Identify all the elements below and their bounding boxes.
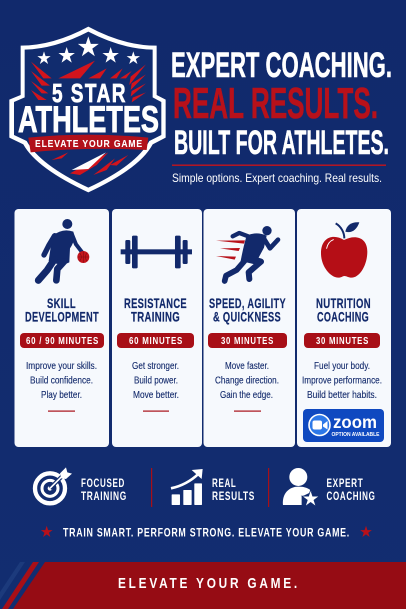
feature: focused training: TRAINING bbox=[81, 489, 127, 503]
card text: Move faster. bbox=[225, 360, 269, 372]
card title bbox=[124, 296, 187, 324]
card text bbox=[132, 360, 179, 401]
card text: Build better habits. bbox=[307, 389, 377, 401]
feature: expert coaching: EXPERT bbox=[326, 476, 364, 490]
card text: Build power. bbox=[134, 374, 178, 386]
icon: basketball player bbox=[38, 219, 89, 280]
duration pill: 60 MINUTES bbox=[129, 335, 183, 347]
duration pill bbox=[304, 333, 380, 348]
card title: COACHING bbox=[317, 310, 369, 324]
card text: Improve your skills. bbox=[26, 360, 97, 372]
heading bbox=[171, 45, 392, 162]
logo: 5 Star Athletes shield: ATHLETES bbox=[18, 99, 159, 140]
icon: sprinter bbox=[216, 226, 278, 281]
icon: target bbox=[35, 467, 72, 503]
panel: nutrition coaching bbox=[297, 209, 391, 447]
duration pill: 60 / 90 MINUTES bbox=[26, 335, 99, 347]
card text: Move better. bbox=[133, 389, 179, 401]
icon: apple bbox=[321, 222, 367, 278]
card title: SPEED, AGILITY bbox=[209, 296, 286, 311]
feature: focused training bbox=[35, 467, 127, 503]
feature: expert coaching bbox=[283, 468, 376, 507]
footer band: ELEVATE YOUR GAME. bbox=[118, 575, 300, 592]
zoom badge bbox=[303, 409, 384, 442]
feature: real results: REAL bbox=[212, 476, 236, 490]
zoom badge: zoom bbox=[333, 412, 377, 432]
footer band bbox=[0, 562, 406, 609]
card title: NUTRITION bbox=[316, 296, 371, 311]
card text: Gain the edge. bbox=[220, 389, 273, 401]
duration pill bbox=[117, 333, 194, 348]
card title: & QUICKNESS bbox=[213, 310, 281, 324]
card title bbox=[25, 296, 99, 324]
card title: DEVELOPMENT bbox=[25, 310, 99, 324]
duration pill: 30 MINUTES bbox=[316, 335, 369, 347]
card title: TRAINING bbox=[131, 310, 180, 324]
feature: real results: RESULTS bbox=[212, 489, 255, 503]
card text bbox=[26, 360, 97, 401]
feature: expert coaching: COACHING bbox=[326, 489, 376, 503]
card text: Play better. bbox=[41, 389, 82, 401]
feature: real results bbox=[171, 469, 255, 505]
duration pill: 30 MINUTES bbox=[221, 335, 274, 347]
card text: Build confidence. bbox=[30, 374, 93, 386]
panel: resistance training bbox=[112, 209, 202, 447]
card text bbox=[215, 360, 279, 401]
card text: Change direction. bbox=[215, 374, 279, 386]
logo: 5 Star Athletes shield: ELEVATE YOUR GAME bbox=[35, 139, 143, 150]
icon: rising bar chart bbox=[171, 469, 203, 505]
card title: RESISTANCE bbox=[124, 296, 187, 311]
logo: 5 Star Athletes shield: 5 STAR bbox=[52, 78, 127, 108]
card text: Get stronger. bbox=[132, 360, 179, 372]
card text: Fuel your body. bbox=[314, 360, 370, 372]
feature: focused training: FOCUSED bbox=[81, 476, 125, 490]
card title bbox=[316, 296, 371, 324]
card title: SKILL bbox=[47, 296, 76, 311]
zoom badge: OPTION AVAILABLE bbox=[332, 432, 380, 438]
duration pill bbox=[208, 333, 287, 348]
panel: skill development bbox=[14, 209, 109, 447]
panel: speed, agility and quickness bbox=[204, 209, 295, 447]
duration pill bbox=[20, 333, 104, 348]
card text: Improve performance. bbox=[302, 374, 382, 386]
logo: 5 Star Athletes shield bbox=[9, 27, 166, 192]
icon: coach with star bbox=[283, 468, 320, 507]
icon: barbell bbox=[121, 236, 192, 268]
card title bbox=[209, 296, 286, 324]
card text bbox=[302, 360, 382, 401]
